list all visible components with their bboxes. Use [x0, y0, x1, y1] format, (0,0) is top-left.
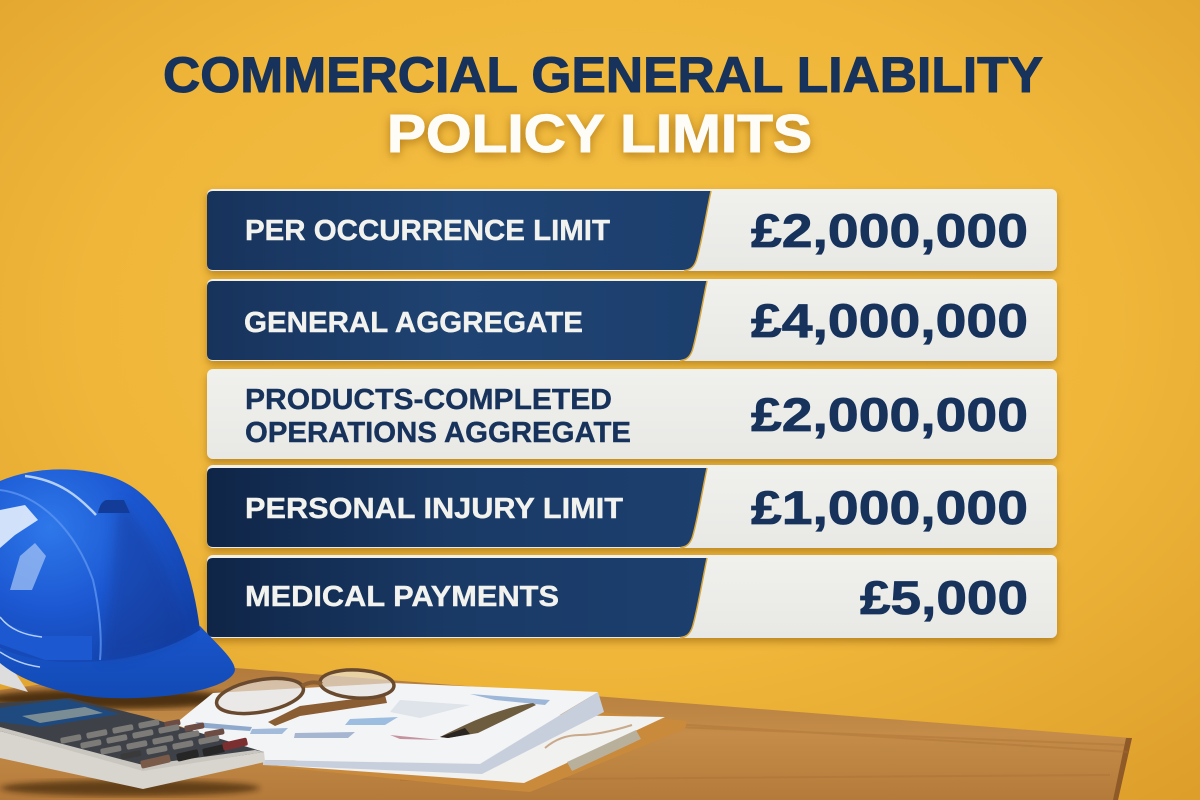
label text: PER OCCURRENCE LIMIT: [245, 215, 610, 247]
clipboard with papers: [175, 668, 687, 792]
title line 1: COMMERCIAL GENERAL LIABILITY: [163, 47, 1043, 103]
icon: blue hard hat: [0, 469, 235, 709]
title: [163, 47, 1043, 164]
icon: glasses: [214, 668, 395, 726]
calculator screen: [0, 699, 120, 727]
icon: calculator: [0, 698, 265, 796]
label text: PERSONAL INJURY LIMIT: [245, 493, 623, 525]
label tab: [207, 558, 707, 637]
title line 2: POLICY LIMITS: [387, 104, 812, 164]
top page: [175, 683, 598, 763]
panel: medical payments: [207, 555, 1057, 638]
clipboard: [258, 712, 687, 792]
panel: personal injury limit: [207, 465, 1057, 548]
amount: £4,000,000: [751, 294, 1028, 347]
clip: [567, 730, 641, 771]
hat reflections: [0, 505, 38, 548]
amount: £5,000: [860, 571, 1028, 624]
amount: £1,000,000: [751, 481, 1028, 534]
calculator top face: [0, 698, 264, 770]
panel: general aggregate: [207, 279, 1057, 361]
calculator front: [0, 731, 265, 789]
page content blocks: [195, 722, 252, 731]
label text: GENERAL AGGREGATE: [244, 307, 583, 339]
label text: MEDICAL PAYMENTS: [245, 581, 559, 613]
panel: products-completed operations aggregate: OPERATIONS AGGREGATE: [245, 417, 631, 449]
paper stack edge: [263, 692, 604, 774]
amount: £2,000,000: [751, 388, 1028, 441]
hat dome: [0, 469, 200, 662]
label text: PRODUCTS-COMPLETED: [245, 384, 612, 416]
label tab: [207, 468, 707, 547]
amount: £2,000,000: [751, 204, 1028, 257]
back paper: [270, 715, 665, 783]
label tab: [207, 281, 707, 360]
panel: per occurrence limit: [207, 189, 1057, 271]
panel: products-completed operations aggregate: [207, 369, 1057, 459]
label tab: [207, 191, 711, 270]
calculator keys: [60, 719, 248, 769]
icon: pen: [440, 703, 536, 738]
hat brim: [0, 626, 235, 698]
wooden desk: [0, 668, 1132, 800]
